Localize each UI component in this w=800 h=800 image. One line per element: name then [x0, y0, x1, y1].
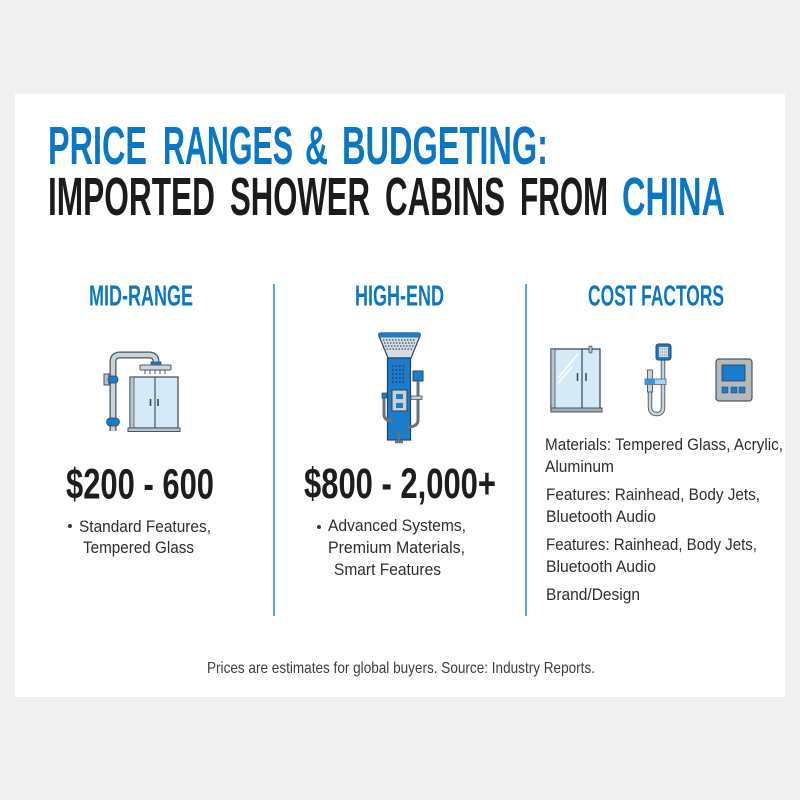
heading: mid-range: MID-RANGE [89, 280, 193, 312]
text: mid-range details: Standard Features, [79, 517, 211, 536]
title: FROM [520, 167, 608, 227]
heading: high-end: HIGH-END [355, 280, 444, 312]
text: mid-range details [68, 517, 211, 557]
text: cost factors list: Brand/Design [546, 585, 640, 604]
title [48, 116, 725, 227]
text: mid-range details: Tempered Glass [83, 538, 194, 557]
icon: handheld shower [645, 344, 671, 414]
text: cost factors list [545, 435, 783, 604]
icon: glass shower door [551, 346, 602, 412]
title: CHINA [622, 167, 725, 227]
price: high-end: $800 - 2,000+ [304, 460, 496, 508]
title: RANGES [163, 116, 293, 176]
title: PRICE [48, 116, 147, 176]
text: high-end details: Advanced Systems, [328, 516, 466, 535]
title: SHOWER [230, 167, 370, 227]
price: mid-range: $200 - 600 [66, 460, 214, 508]
text: high-end details: Smart Features [334, 560, 441, 579]
icon: digital control panel [716, 359, 752, 401]
footer source note: Prices are estimates for global buyers. Source: Industry Reports. [207, 660, 595, 677]
text: cost factors list: Features: Rainhead, Body Jets, [546, 485, 760, 504]
title: IMPORTED [48, 167, 215, 227]
divider left [273, 284, 275, 616]
title: CABINS [385, 167, 505, 227]
text: high-end details: Premium Materials, [328, 538, 465, 557]
panel: main white card [15, 94, 785, 697]
title: & [305, 116, 328, 176]
text: cost factors list: Bluetooth Audio [546, 557, 656, 576]
icon: mid-range shower cabin [104, 355, 180, 432]
title: BUDGETING: [342, 116, 548, 176]
text: cost factors list: Features: Rainhead, Body Jets, [546, 535, 757, 554]
divider right [525, 284, 527, 616]
text: cost factors list: Bluetooth Audio [546, 507, 656, 526]
icon: high-end shower panel [379, 333, 423, 442]
text: cost factors list: Aluminum [545, 457, 614, 476]
text: high-end details [317, 516, 466, 579]
